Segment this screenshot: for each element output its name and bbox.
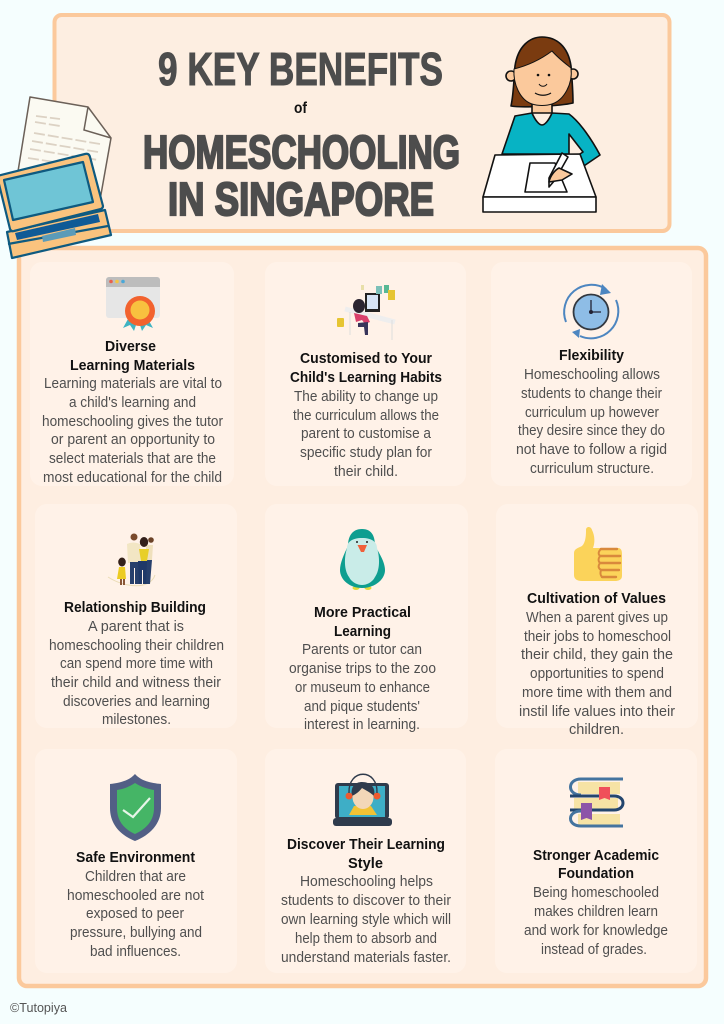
icon: clock with arrows: [564, 284, 618, 338]
body text: [281, 874, 451, 966]
main panel: [19, 248, 706, 986]
heading: Customised to Your: [300, 351, 432, 367]
heading: Diverse: [105, 339, 156, 355]
heading: Learning: [334, 624, 391, 640]
body text: homeschooling gives the tutor: [42, 414, 223, 430]
body text: homeschooled are not: [67, 888, 204, 904]
body text: exposed to peer: [86, 906, 184, 922]
heading: [314, 605, 411, 640]
body text: their child, they gain the: [521, 647, 673, 663]
panel: card 3: [491, 262, 692, 486]
icon: shield with check: [110, 774, 161, 841]
body text: Learning materials are vital to: [44, 376, 222, 392]
panel: card 6: [496, 504, 698, 738]
heading: More Practical: [314, 605, 411, 621]
icon: laptop with headset tutor: [333, 774, 392, 826]
heading: [287, 837, 445, 872]
body text: [42, 376, 223, 486]
body text: opportunities to spend: [530, 666, 664, 682]
body text: most educational for the child: [43, 470, 222, 486]
panel: card 8: [265, 749, 466, 973]
heading: Cultivation of Values: [527, 591, 666, 607]
heading: Learning Materials: [70, 358, 195, 374]
body text: their jobs to homeschool: [524, 629, 671, 645]
title: HOMESCHOOLING: [143, 126, 460, 178]
icon: paper document: [15, 97, 111, 200]
heading: Discover Their Learning: [287, 837, 445, 853]
body text: their child and witness their: [51, 675, 221, 691]
body text: bad influences.: [90, 944, 181, 960]
body text: Homeschooling helps: [300, 874, 433, 890]
body text: own learning style which will: [281, 912, 451, 928]
copyright credit: ©Tutopiya: [10, 1001, 67, 1015]
body text: the curriculum allows the: [293, 408, 439, 424]
heading: Flexibility: [559, 348, 624, 364]
body text: Being homeschooled: [533, 885, 659, 901]
body text: makes children learn: [534, 904, 658, 920]
body text: [49, 619, 224, 728]
body text: A parent that is: [88, 619, 184, 635]
icon: thumbs up: [574, 527, 622, 581]
body text: or parent an opportunity to: [51, 432, 215, 448]
body text: homeschooling their children: [49, 638, 224, 654]
body text: [516, 367, 667, 477]
heading: [533, 848, 659, 882]
heading: Style: [348, 856, 383, 872]
body text: curriculum up however: [525, 405, 659, 421]
body text: select materials that are the: [49, 451, 216, 467]
header panel: [54, 15, 670, 231]
body text: a child's learning and: [69, 395, 196, 411]
body text: or museum to enhance: [295, 680, 430, 696]
panel: card 9: [495, 749, 697, 973]
body text: [524, 885, 668, 958]
icon: laptop: [0, 154, 111, 258]
body text: and pique students': [304, 699, 420, 715]
body text: students to change their: [521, 386, 662, 402]
body text: not have to follow a rigid: [516, 442, 667, 458]
heading: Child's Learning Habits: [290, 370, 442, 386]
body text: The ability to change up: [294, 389, 438, 405]
body text: understand materials faster.: [281, 950, 451, 966]
body text: they desire since they do: [518, 423, 665, 439]
icon: stack of books: [570, 779, 623, 826]
icon: certificate badge: [106, 277, 160, 331]
heading: Stronger Academic: [533, 848, 659, 864]
body text: more time with them and: [522, 685, 672, 701]
panel: card 7: [35, 749, 237, 973]
body text: interest in learning.: [304, 717, 420, 733]
body text: and work for knowledge: [524, 923, 668, 939]
body text: help them to absorb and: [295, 931, 437, 947]
body text: discoveries and learning: [63, 694, 210, 710]
body text: instead of grades.: [541, 942, 647, 958]
body text: [519, 610, 675, 738]
body text: milestones.: [102, 712, 171, 728]
heading: Safe Environment: [76, 850, 195, 866]
title: IN SINGAPORE: [168, 173, 434, 225]
title: of: [294, 100, 308, 117]
body text: their child.: [334, 464, 398, 480]
body text: specific study plan for: [300, 445, 432, 461]
body text: organise trips to the zoo: [289, 661, 436, 677]
body text: [67, 869, 204, 960]
icon: woman writing at desk: [483, 37, 600, 212]
title: [143, 43, 460, 225]
body text: curriculum structure.: [530, 461, 654, 477]
heading: Foundation: [558, 866, 634, 882]
body text: [289, 642, 436, 733]
body text: [293, 389, 439, 480]
panel: card 1: [30, 262, 234, 486]
body text: Children that are: [85, 869, 186, 885]
body text: students to discover to their: [281, 893, 451, 909]
body text: can spend more time with: [60, 656, 213, 672]
heading: [70, 339, 195, 374]
panel: card 2: [265, 262, 466, 486]
heading: Relationship Building: [64, 600, 206, 616]
title: 9 KEY BENEFITS: [158, 43, 443, 95]
panel: card 5: [265, 504, 468, 733]
body text: instil life values into their: [519, 704, 675, 720]
body text: parent to customise a: [301, 426, 432, 442]
body text: When a parent gives up: [526, 610, 668, 626]
body text: pressure, bullying and: [70, 925, 202, 941]
body text: Parents or tutor can: [302, 642, 422, 658]
icon: penguin: [340, 529, 385, 590]
icon: student at desk: [337, 285, 395, 340]
body text: children.: [569, 722, 624, 738]
icon: family: [108, 534, 155, 586]
body text: Homeschooling allows: [524, 367, 660, 383]
heading: [290, 351, 442, 386]
panel: card 4: [35, 504, 237, 728]
